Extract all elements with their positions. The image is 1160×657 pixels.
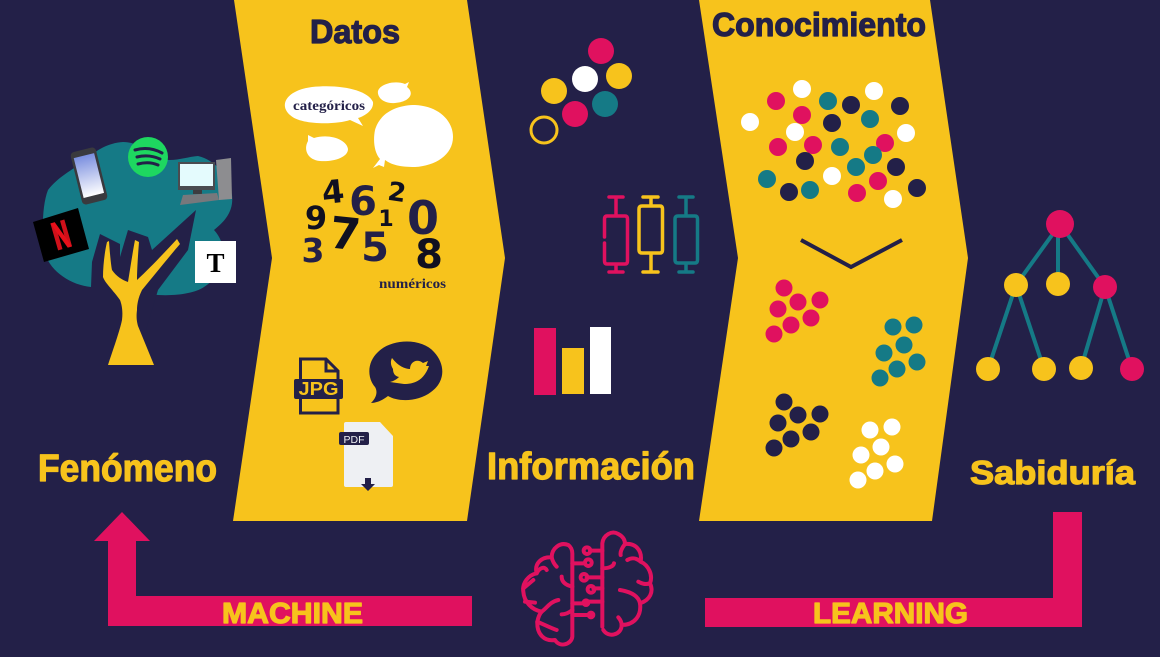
heading: Información: Información	[487, 446, 695, 488]
arrow: Learning	[705, 512, 1082, 630]
heading: Sabiduría: Sabiduría	[970, 454, 1136, 491]
tree shadow	[91, 210, 196, 330]
chart: clustered dots	[766, 280, 926, 488]
arrow: Machine	[94, 512, 472, 630]
panel: Datos chevron	[233, 0, 505, 521]
icon: scattered dots	[531, 38, 632, 143]
chart: scattered numbers: 0	[407, 191, 439, 245]
bubble: small left	[306, 135, 348, 161]
icon: desktop computer	[178, 158, 232, 205]
panel: Conocimiento chevron	[699, 0, 968, 521]
icon: New York Times: T	[206, 248, 225, 278]
icon: JPG file	[294, 359, 343, 413]
chart: scattered numbers	[302, 172, 443, 278]
icon: Twitter bubble	[369, 342, 442, 403]
label: MACHINE: MACHINE	[222, 598, 363, 630]
chart: decision tree	[976, 210, 1144, 381]
icon: PDF file	[339, 422, 393, 491]
chart: box plots	[604, 197, 698, 272]
chart: speech bubbles categorical	[285, 82, 453, 168]
icon: PDF file: PDF	[344, 434, 364, 446]
bubble: large	[373, 105, 453, 168]
tree trunk	[103, 239, 180, 365]
icon: smartphone	[70, 147, 108, 205]
icon: New York Times	[195, 241, 236, 283]
text: categóricos: categóricos	[293, 99, 366, 114]
chart: scattered numbers: 8	[415, 232, 443, 278]
text: numéricos: numéricos	[379, 277, 447, 292]
icon: Netflix	[33, 208, 89, 262]
chart: bar chart	[534, 327, 611, 395]
bubble: categóricos	[285, 82, 453, 168]
icon: tree with data sources	[33, 137, 236, 365]
heading: Datos: Datos	[310, 13, 400, 50]
bubble: small top	[378, 82, 411, 103]
chart: scattered numbers: 4	[320, 172, 346, 212]
chart: scattered numbers: 2	[386, 177, 408, 209]
chart: scattered numbers: 3	[302, 231, 324, 270]
arrow: down chevron	[801, 240, 902, 267]
chart: scattered numbers: 1	[378, 207, 394, 232]
chart: scattered numbers: 9	[305, 199, 327, 237]
tree crown	[43, 142, 232, 295]
heading: Fenómeno: Fenómeno	[38, 448, 217, 490]
icon: brain circuit	[523, 533, 652, 645]
chart: unsorted dots	[741, 80, 926, 208]
icon: JPG file: JPG	[298, 379, 338, 399]
heading: Conocimiento: Conocimiento	[712, 6, 926, 43]
label: LEARNING: LEARNING	[813, 598, 968, 630]
chart: scattered numbers: 5	[361, 225, 389, 271]
chart: scattered numbers: 6	[349, 179, 377, 225]
chart: scattered numbers: 7	[327, 208, 363, 261]
icon: Spotify	[128, 137, 168, 177]
